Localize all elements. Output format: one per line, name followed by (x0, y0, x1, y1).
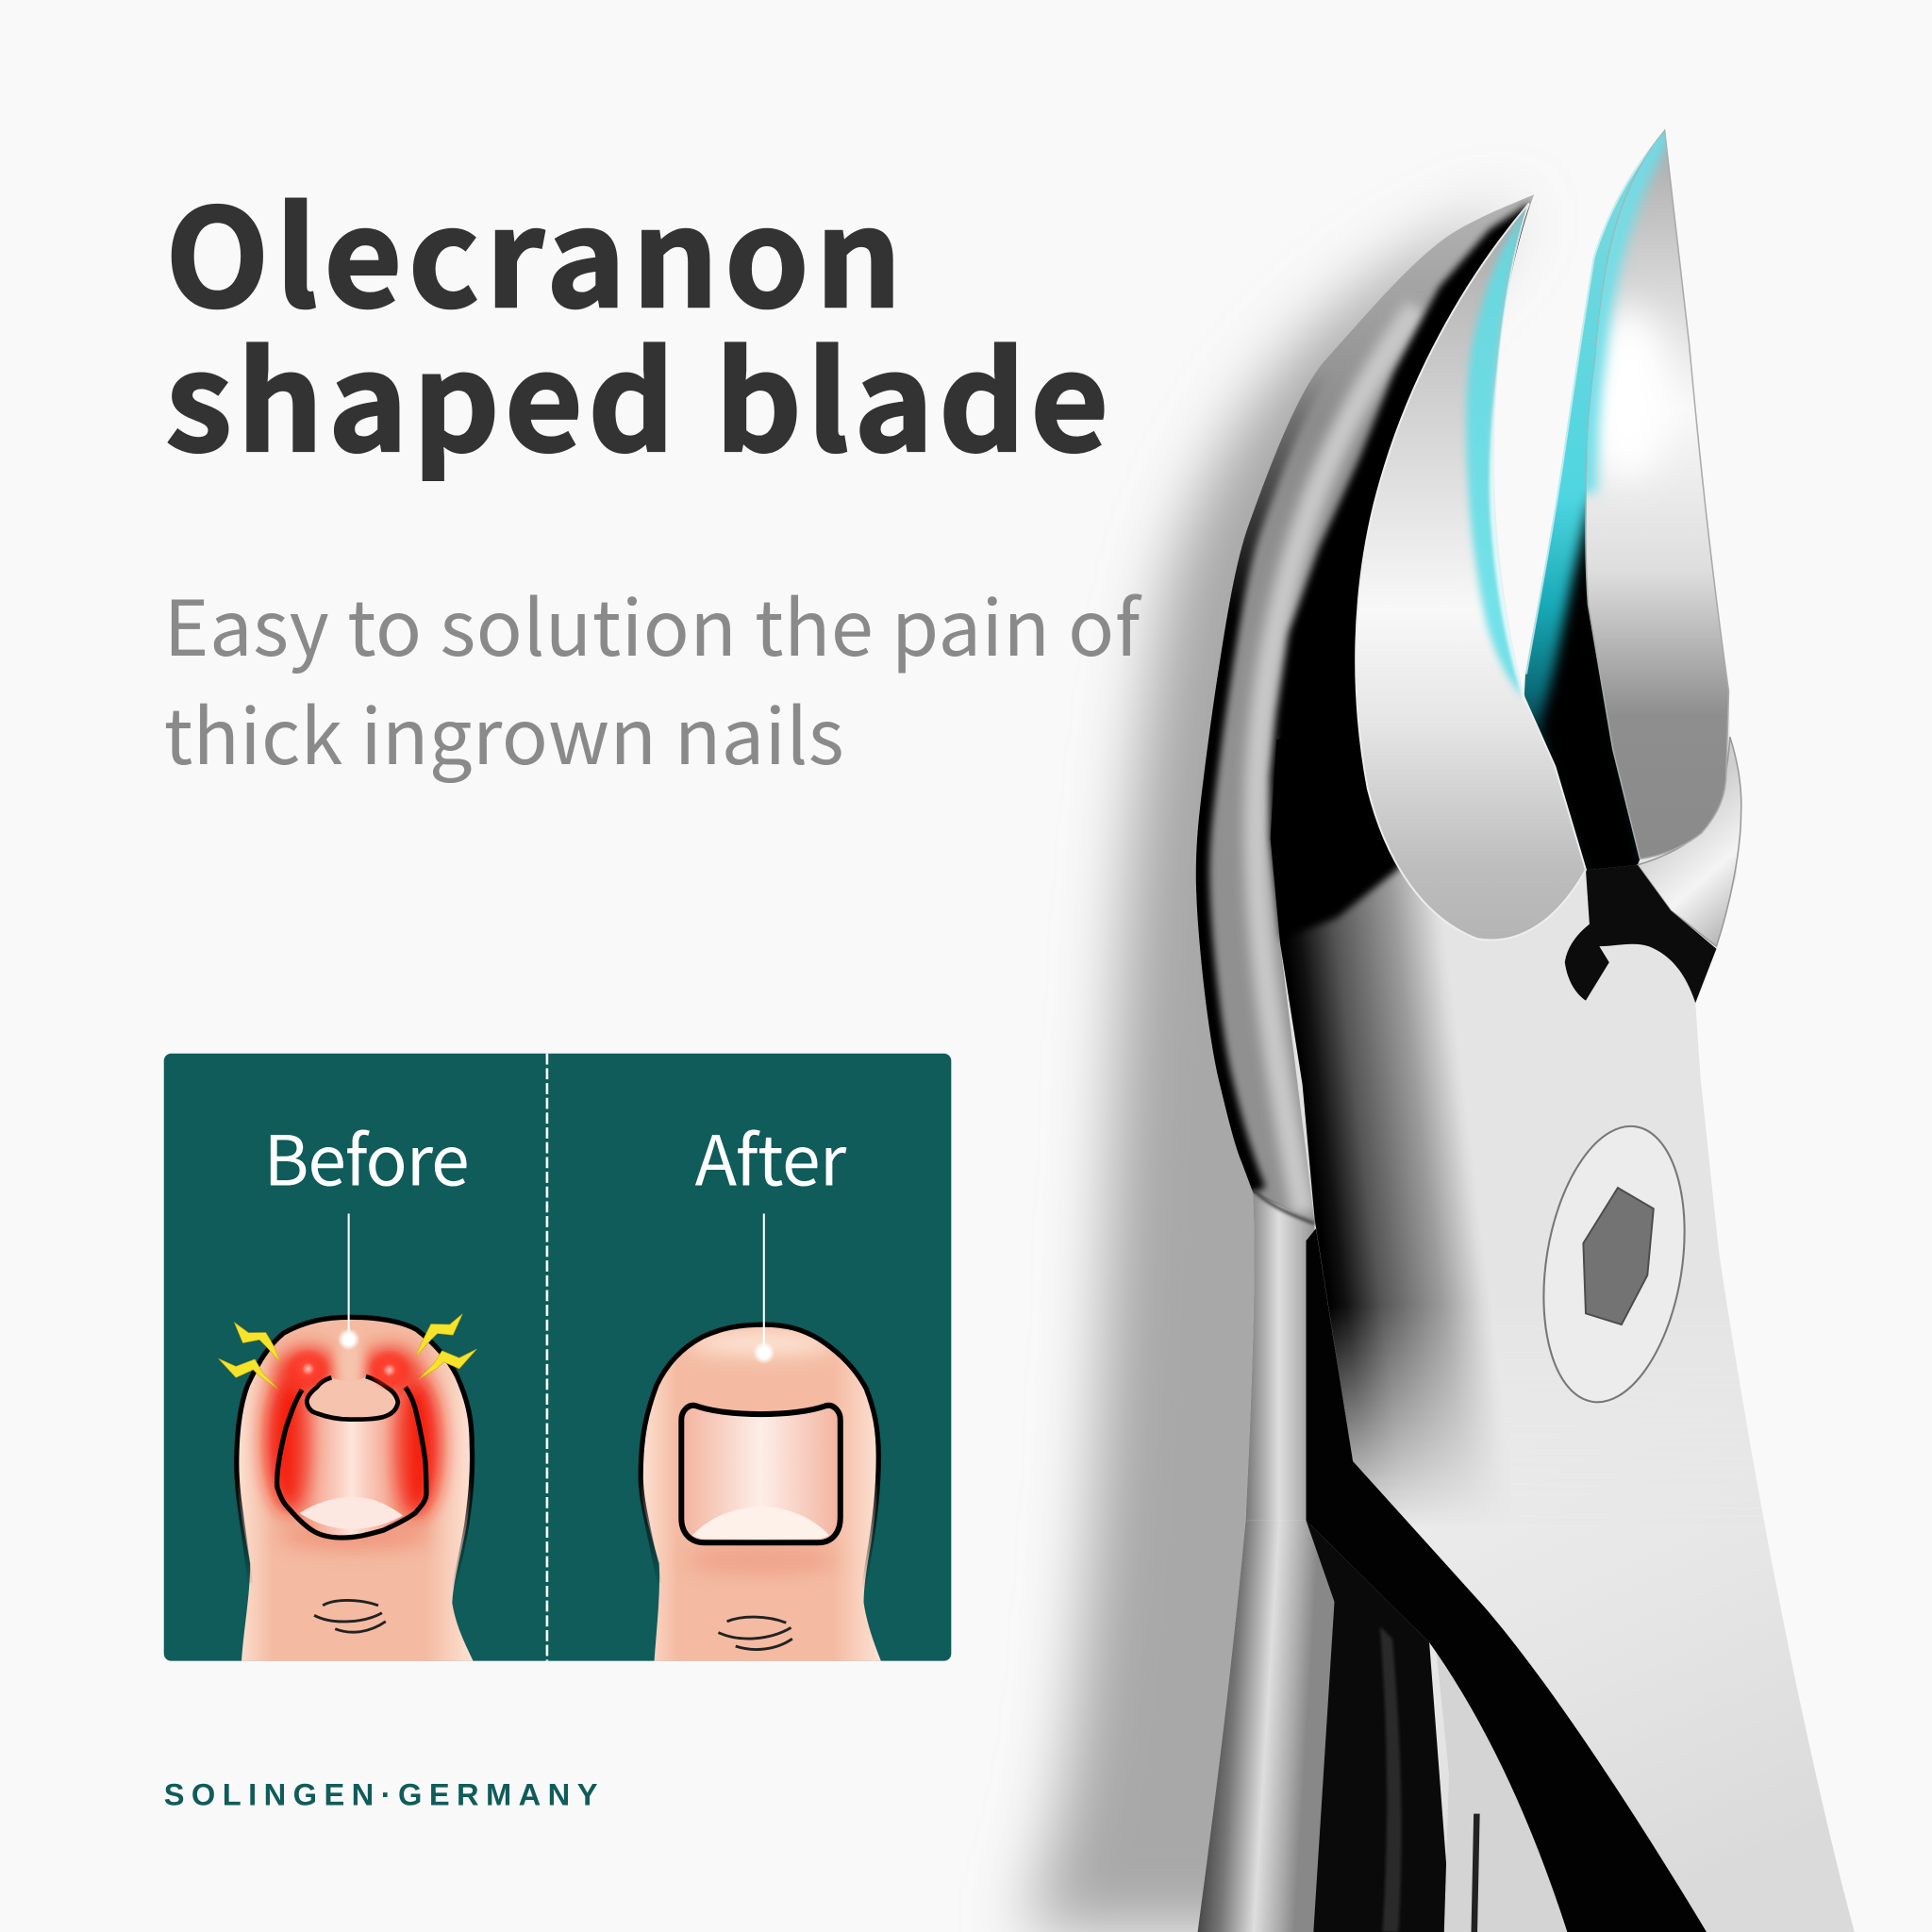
bolt upper left (234, 1323, 280, 1362)
red inflammation (265, 1336, 441, 1550)
black core of band (1525, 130, 1665, 881)
subtitle line 1: Easy to solution the pain of (164, 568, 1142, 678)
arm inner stripes (1306, 1521, 1452, 1932)
label: before: Before (264, 1106, 470, 1206)
pincer tips (1565, 865, 1716, 1003)
right blade face (1586, 130, 1728, 858)
outer dark edge (1196, 362, 1324, 1192)
panel background (164, 1054, 951, 1661)
left blade face (1356, 204, 1586, 941)
pliers body (1196, 194, 1855, 1932)
pain points (287, 1348, 410, 1391)
callout dot: before (338, 1328, 359, 1351)
outer jaw rim (1183, 185, 1534, 1223)
callout line: before (348, 1214, 350, 1338)
bolt lower left (219, 1358, 277, 1389)
knuckle creases (314, 1600, 386, 1632)
black strip across body (1306, 1228, 1707, 1932)
nail (277, 1376, 426, 1538)
panel: before and after (164, 1054, 951, 1661)
screw (1525, 1116, 1703, 1412)
exposed skin in cuticle (307, 1376, 398, 1420)
right jaw edge band (1524, 130, 1665, 881)
screw ring (1525, 1116, 1703, 1412)
seam shading on body (1270, 740, 1731, 1517)
outer lip of right jaw (1638, 737, 1741, 946)
finger outline (641, 1324, 878, 1595)
hex socket (1583, 1188, 1654, 1324)
nail outline (277, 1388, 426, 1538)
bolt upper right (415, 1314, 462, 1357)
black band behind left blade (1271, 204, 1529, 939)
glow on right blade (1587, 130, 1671, 492)
finger: after (641, 1324, 881, 1661)
callout line: after (763, 1214, 765, 1351)
label: after: After (695, 1106, 847, 1206)
inner handle gap (1437, 1653, 1555, 1932)
subtitle (164, 568, 1142, 787)
lunula (692, 1507, 829, 1539)
ingrown cuticle (307, 1376, 398, 1420)
dashed divider (546, 1054, 548, 1661)
arm top seam (1253, 1191, 1315, 1224)
lunula (299, 1497, 403, 1529)
title line 2: shaped blade (165, 294, 1109, 491)
skin (237, 1317, 474, 1661)
nail (681, 1406, 841, 1542)
lightning icons (219, 1314, 476, 1389)
lower arm upper part (1245, 1192, 1315, 1521)
skin (641, 1324, 881, 1661)
base body metal (1196, 306, 1855, 1932)
pliers shadow (1023, 209, 1522, 1932)
title (165, 150, 1109, 491)
finger: before (237, 1317, 474, 1661)
finger outline (237, 1317, 473, 1595)
subtitle line 2: thick ingrown nails (164, 676, 844, 787)
title line 1: Olecranon (165, 150, 902, 346)
skin tone glow (685, 1331, 838, 1574)
bolt lower right (419, 1349, 476, 1379)
thin slit (1472, 1814, 1480, 1932)
lower arm lower part (1195, 1521, 1336, 1932)
cyan glow on left blade (1466, 204, 1529, 702)
callout dot: after (753, 1341, 775, 1364)
rim highlight (1257, 308, 1417, 1214)
nail clipper (1196, 128, 1855, 1932)
nail plate (277, 1388, 426, 1538)
brand text: SOLINGEN·GERMANY (164, 1776, 598, 1811)
knuckle creases (718, 1617, 792, 1649)
